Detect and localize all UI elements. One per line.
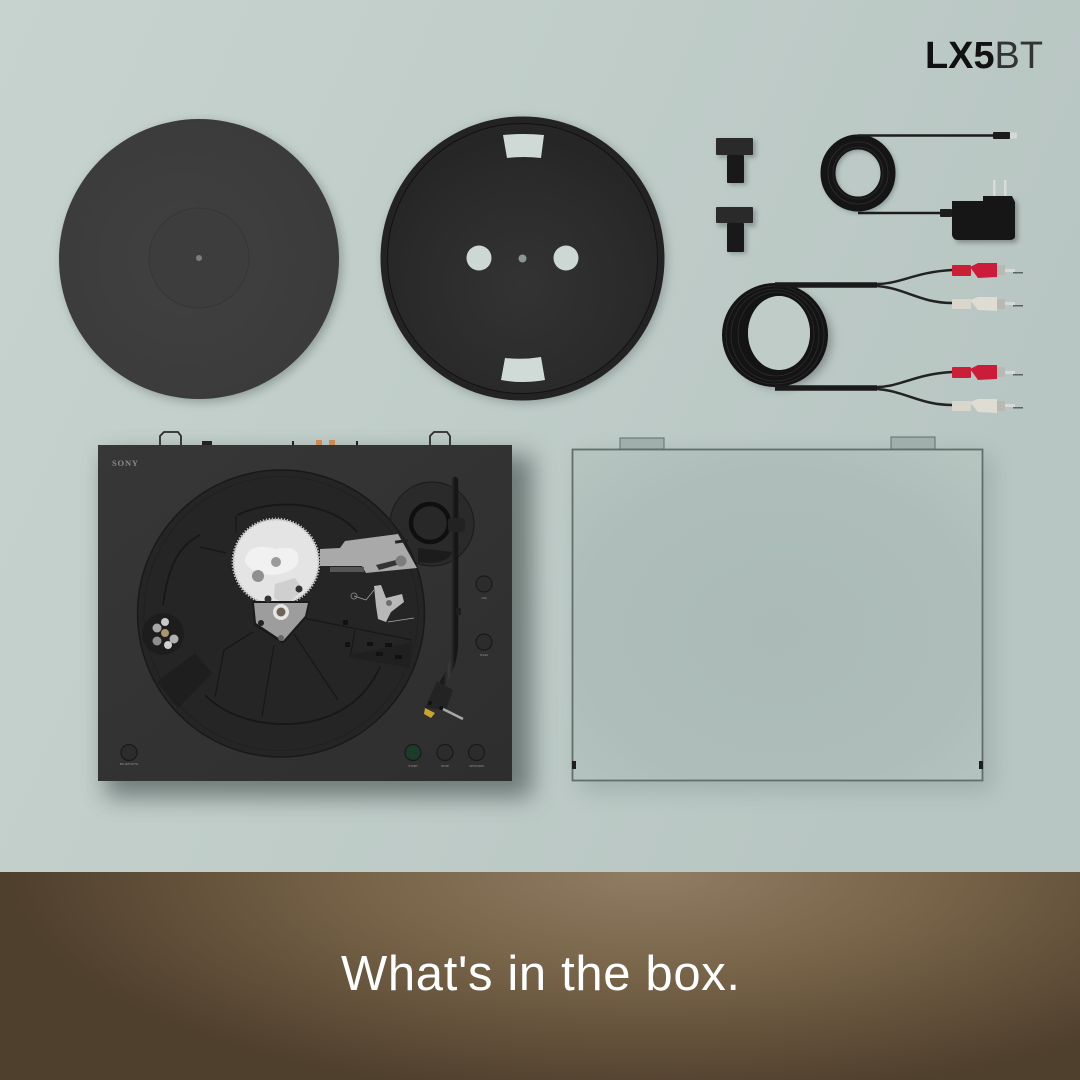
metal plate under gear bbox=[252, 586, 310, 644]
counterweight disc bbox=[390, 482, 474, 566]
caption: What's in the box. bbox=[341, 947, 740, 1001]
spoke lines bbox=[215, 618, 412, 716]
front buttons bbox=[120, 744, 484, 768]
platter with cut-outs bbox=[380, 116, 667, 403]
RCA plug: red bottom bbox=[952, 365, 1023, 380]
turntable body: SPEED bbox=[480, 654, 488, 657]
turntable body: SIZE bbox=[481, 597, 487, 600]
front buttons: STOP bbox=[441, 764, 449, 768]
central gear bbox=[231, 517, 321, 607]
shelf band bbox=[0, 872, 1080, 1080]
brand title: LX5BT: LX5BT bbox=[925, 35, 1043, 77]
tonearm bbox=[424, 480, 465, 719]
turntable body bbox=[98, 432, 532, 797]
headshell clips bbox=[716, 138, 756, 254]
small dark openings bbox=[343, 620, 402, 659]
platter recess bbox=[138, 470, 424, 757]
power adapter and cable bbox=[828, 132, 1018, 243]
RCA plug: white bottom bbox=[952, 399, 1023, 413]
RCA plug: white top bbox=[952, 297, 1023, 311]
small lever mechanism bbox=[351, 585, 414, 622]
rear hinges and connectors bbox=[160, 432, 450, 445]
SONY logo: SONY bbox=[112, 458, 139, 468]
front buttons: BLUETOOTH bbox=[120, 762, 138, 766]
RCA stereo cable bbox=[722, 263, 1023, 413]
metal slider bar bbox=[320, 534, 417, 573]
side knobs bbox=[476, 576, 492, 650]
pulley cluster bbox=[142, 613, 184, 655]
dust cover lid bbox=[572, 437, 992, 791]
RCA plug: red top bbox=[952, 263, 1023, 278]
rubber platter mat bbox=[59, 119, 342, 402]
front buttons: START bbox=[408, 764, 418, 768]
front buttons: UP/DOWN bbox=[469, 764, 484, 768]
tonearm counterweight bbox=[411, 504, 453, 563]
